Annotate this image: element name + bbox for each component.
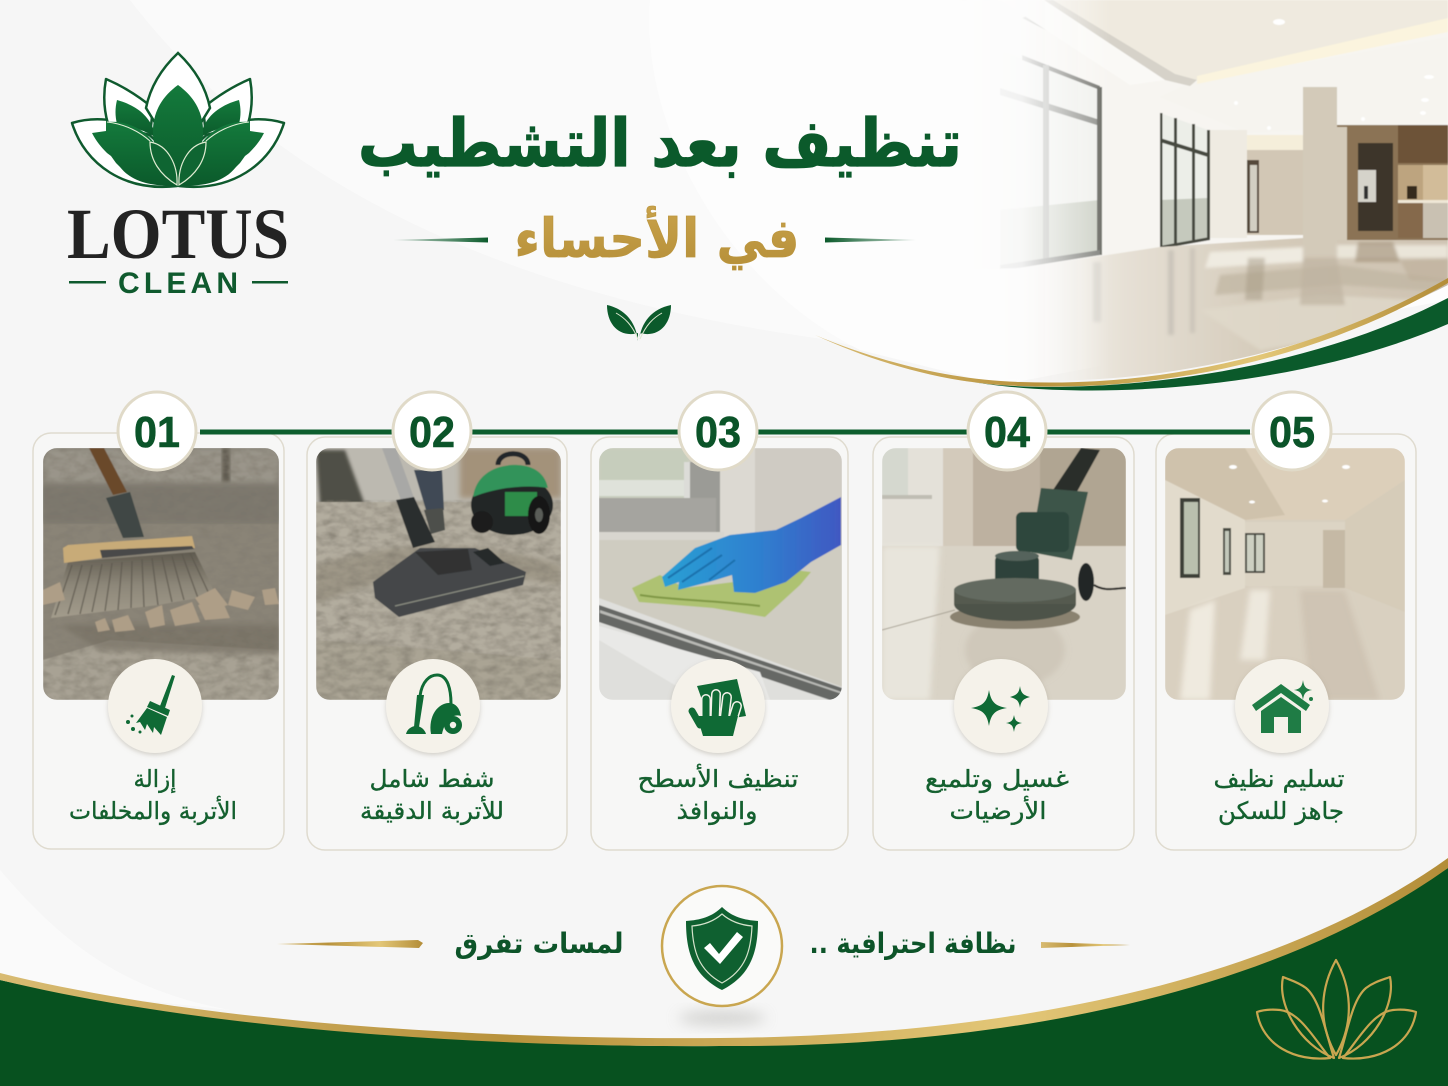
timeline connector — [200, 430, 1250, 434]
bottom green band — [0, 858, 1448, 1086]
icon badge: vacuum cleaner — [386, 659, 480, 753]
marble floor — [1001, 238, 1448, 380]
number badge 04 — [968, 392, 1046, 470]
step sublabel: والنوافذ — [676, 797, 758, 825]
number badge 05 — [1253, 392, 1331, 470]
icon: twin leaves — [607, 305, 671, 341]
number badge 02 — [393, 392, 471, 470]
hero green and gold swoosh — [815, 278, 1448, 390]
step label: إزالة — [134, 765, 176, 794]
hero photo: empty finished interior — [1000, 0, 1448, 380]
logo wordmark LOTUS: LOTUS — [67, 194, 289, 274]
number badge 05: 05 — [1269, 408, 1315, 457]
icon: shield with check — [686, 907, 758, 990]
icon badge: house with sparkle — [1235, 659, 1329, 753]
title: تنظيف بعد التشطيب — [358, 105, 962, 182]
panel: step 4 — [873, 437, 1134, 850]
step sublabel: الأرضيات — [950, 796, 1046, 825]
step sublabel: للأتربة الدقيقة — [360, 796, 504, 825]
photo: broom sweeping rubble — [43, 448, 279, 700]
number badge 04: 04 — [984, 408, 1030, 457]
number badge 03: 03 — [695, 408, 741, 457]
step label: غسيل وتلميع — [925, 765, 1069, 793]
icon badge: hand with cloth — [671, 659, 765, 753]
number badge 02: 02 — [409, 408, 455, 457]
subtitle left flourish — [393, 238, 488, 242]
column — [1303, 87, 1337, 255]
shield emblem — [662, 886, 782, 1025]
icon badge: broom — [108, 659, 202, 753]
number badge 03 — [679, 392, 757, 470]
tagline right flourish — [1041, 942, 1130, 948]
photo: gloved hand wiping surface — [599, 448, 842, 700]
subtitle right flourish — [825, 238, 916, 242]
number badge 01 — [118, 392, 196, 470]
photo: floor polishing machine — [882, 448, 1126, 700]
corridor — [1247, 135, 1303, 150]
icon badge: sparkles — [954, 659, 1048, 753]
panel: step 2 — [307, 437, 567, 850]
logo wordmark CLEAN: CLEAN — [118, 267, 238, 300]
icon: gold lotus outline — [1257, 960, 1416, 1059]
panel: step 3 — [591, 437, 848, 850]
logo: Lotus Clean — [67, 53, 289, 300]
panel: step 5 — [1156, 434, 1416, 850]
subtitle: في الأحساء — [514, 206, 800, 270]
step sublabel: جاهز للسكن — [1218, 797, 1344, 825]
number badge 01: 01 — [134, 408, 180, 457]
step sublabel: الأتربة والمخلفات — [69, 796, 237, 825]
step label: تسليم نظيف — [1214, 765, 1344, 793]
photo: clean empty apartment — [1165, 448, 1405, 700]
step label: شفط شامل — [370, 765, 494, 793]
cabinets and dark doorway — [1337, 125, 1448, 240]
tagline left part: لمسات تفرق — [454, 927, 624, 960]
second window — [1162, 115, 1207, 200]
photo: vacuum nozzle on floor — [316, 448, 561, 700]
icon: lotus flower — [72, 53, 284, 187]
tagline left flourish — [277, 940, 423, 948]
tagline right part: نظافة احترافية .. — [810, 927, 1016, 960]
step label: تنظيف الأسطح — [638, 764, 798, 793]
left window — [1000, 50, 1100, 270]
panel: step 1 — [33, 433, 284, 849]
